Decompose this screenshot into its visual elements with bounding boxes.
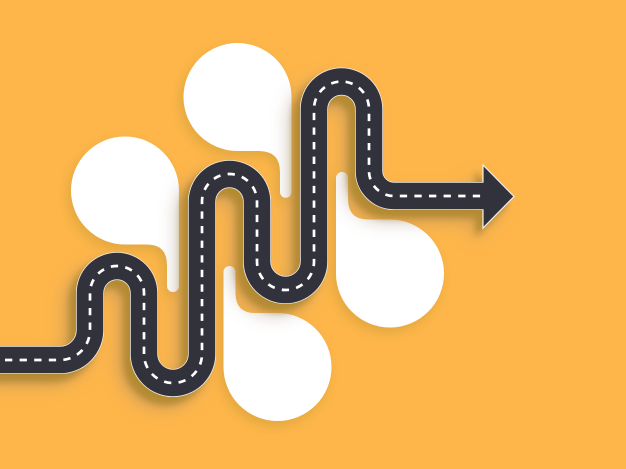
road surface xyxy=(0,81,487,383)
panel: top teardrop xyxy=(184,43,292,198)
panel: bottom teardrop xyxy=(224,266,332,421)
winding road with arrow xyxy=(0,81,514,383)
road centre dashes xyxy=(5,81,483,383)
panel: left teardrop xyxy=(71,136,179,292)
panel: right teardrop xyxy=(336,172,444,328)
road edge xyxy=(0,81,485,383)
arrow head edge xyxy=(483,165,514,228)
white teardrop panels xyxy=(71,43,444,421)
